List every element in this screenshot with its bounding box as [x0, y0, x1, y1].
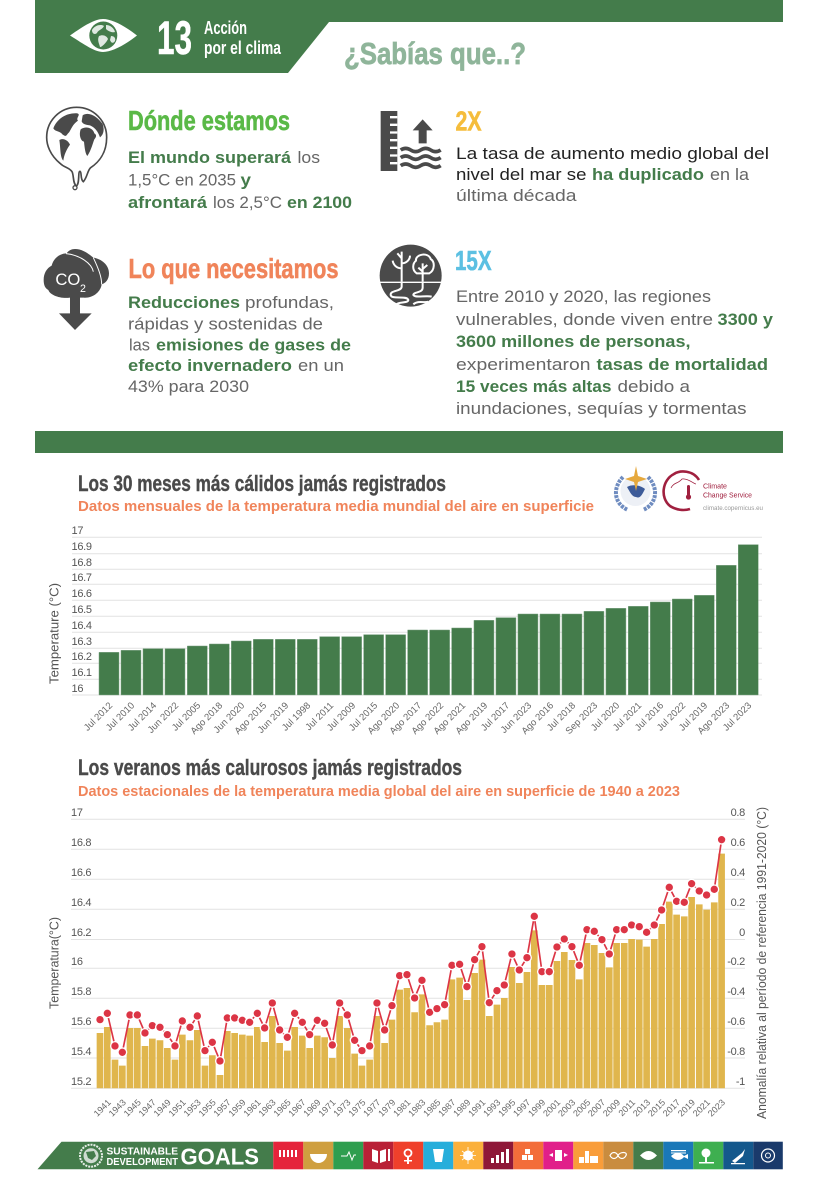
text block: los: [298, 149, 320, 167]
x axis labels: Ago 2017: [388, 700, 424, 737]
heading: Dónde estamos: [128, 105, 290, 136]
x axis labels: Jul 2017: [479, 700, 512, 734]
right y axis labels: [727, 807, 745, 1088]
x axis labels: Ago 2019: [454, 700, 490, 737]
right y axis labels: -1: [736, 1076, 745, 1088]
text block: rápidas y sostenidas de: [128, 316, 323, 334]
left y axis labels: 16.4: [71, 897, 91, 909]
x axis year labels: 2017: [661, 1097, 682, 1119]
text block: 15 veces más altas: [456, 378, 612, 396]
y axis labels: 16.3: [72, 636, 92, 648]
left y axis labels: [71, 807, 91, 1088]
y axis labels: 16.6: [72, 588, 92, 600]
combo chart: hottest summers: [46, 807, 769, 1119]
left y axis labels: 16: [71, 956, 83, 968]
x axis labels: Jul 2018: [545, 700, 578, 734]
x axis labels: Ago 2016: [520, 700, 556, 737]
SDG tiles row: [273, 1142, 783, 1169]
x axis year labels: 2003: [556, 1097, 577, 1119]
panel: lo que necesitamos: [44, 249, 351, 396]
panel: 15X mortality: [380, 245, 774, 418]
x axis year labels: 1951: [167, 1097, 188, 1119]
x axis year labels: 2009: [601, 1097, 622, 1119]
x axis year labels: 2023: [706, 1097, 727, 1119]
x axis year labels: 1961: [241, 1097, 263, 1119]
x axis year labels: 1943: [107, 1097, 128, 1119]
text block: 43% para 2030: [128, 378, 249, 396]
goal name: Acción: [204, 18, 247, 38]
bars: [99, 545, 758, 695]
logo: Copernicus Climate Change Service: Climate: [703, 482, 727, 490]
left y axis labels: 15.8: [71, 986, 91, 998]
text block: efecto invernadero: [128, 357, 292, 375]
x axis labels: Jul 2010: [104, 700, 137, 734]
text block: El mundo superará: [128, 149, 292, 167]
left y axis labels: 15.2: [71, 1076, 91, 1088]
x axis year labels: 1963: [256, 1097, 278, 1119]
icon: UN emblem: [80, 1145, 102, 1167]
footer wordmark: [106, 1143, 259, 1169]
x axis labels: Jun 2020: [212, 700, 247, 736]
x axis labels: Jul 1998: [280, 700, 313, 734]
x axis labels: Jul 2012: [82, 700, 115, 734]
x axis year labels: 1987: [436, 1097, 457, 1119]
x axis labels: Jul 2019: [677, 700, 710, 734]
text block: en 2100: [287, 194, 352, 212]
x axis labels: Jul 2005: [170, 700, 203, 734]
x axis year labels: 2005: [571, 1097, 592, 1119]
text block: La tasa de aumento medio global del: [456, 145, 769, 163]
text block: experimentaron: [456, 356, 590, 374]
goal name: por el clima: [204, 38, 282, 58]
text block: 3600 millones de personas,: [456, 333, 690, 351]
x axis labels: Ago 2020: [366, 700, 402, 737]
x axis year labels: 1999: [526, 1097, 547, 1119]
page title: ¿Sabías que..?: [344, 36, 526, 71]
footer wordmark: SUSTAINABLE: [106, 1145, 178, 1157]
icon: CO2 cloud with down arrow: [44, 249, 109, 330]
bar chart: 30 warmest months: [46, 525, 762, 737]
chart heading: 30 warmest months: Datos mensuales de la temperatura media mundial del aire en superficie: [78, 498, 594, 515]
y axis labels: 17: [72, 525, 83, 537]
text block: Entre 2010 y 2020, las regiones: [456, 288, 711, 306]
x axis year labels: 1957: [211, 1097, 233, 1119]
x axis year labels: 1971: [316, 1097, 338, 1119]
x axis year labels: 1965: [271, 1097, 293, 1119]
text block: en la: [710, 166, 750, 184]
x axis labels: Ago 2023: [696, 700, 732, 737]
left y axis labels: 16.2: [71, 927, 91, 939]
logo: Copernicus Climate Change Service: Change Service: [703, 490, 752, 500]
x axis labels: Ago 2022: [410, 700, 446, 737]
x axis year labels: 1993: [481, 1097, 502, 1119]
right y axis labels: -0.8: [727, 1046, 745, 1058]
text block: vulnerables, donde viven entre: [456, 311, 713, 329]
footer wordmark: GOALS: [180, 1143, 259, 1169]
x axis labels: Ago 2018: [189, 700, 225, 737]
x axis year labels: 1977: [361, 1097, 383, 1119]
x axis labels: Jul 2020: [589, 700, 622, 734]
x axis year labels: 2021: [691, 1097, 712, 1119]
tile icons: [279, 1147, 774, 1164]
right y axis labels: 0.2: [731, 897, 745, 909]
x axis year labels: 1941: [92, 1097, 113, 1119]
text block: [128, 149, 352, 212]
header banner: [35, 0, 783, 73]
x axis labels: Jul 2022: [655, 700, 688, 734]
x axis labels: Jul 2011: [303, 700, 336, 733]
x axis year labels: 1983: [406, 1097, 428, 1119]
x axis year labels: 1967: [286, 1097, 308, 1119]
x axis labels: Jul 2009: [325, 700, 358, 734]
x axis labels: Jul 2021: [611, 700, 644, 734]
x axis year labels: 1953: [182, 1097, 203, 1119]
y axis labels: 16: [72, 683, 83, 695]
text block: emisiones de gases de: [156, 336, 351, 354]
right y axis labels: 0.4: [731, 867, 745, 879]
x axis labels: Jul 2023: [721, 700, 754, 734]
panel: 2X sea level: [381, 106, 769, 205]
left y axis labels: 16.8: [71, 837, 91, 849]
x axis year labels: 1975: [346, 1097, 368, 1119]
text block: debido a: [618, 378, 691, 396]
icon: trees and roots in circle: [380, 245, 442, 307]
y axis labels: 16.5: [72, 604, 92, 616]
logo: Copernicus Climate Change Service: climate.copernicus.eu: [703, 505, 763, 512]
logo: Copernicus Climate Change Service: [664, 472, 763, 512]
text block: las: [129, 336, 150, 354]
text block: [128, 294, 351, 396]
x axis labels: Jul 2015: [347, 700, 380, 734]
chart heading: hottest summers: Los veranos más calurosos jamás registrados: [78, 755, 462, 780]
x axis labels: Jun 2019: [256, 700, 291, 736]
panel: donde estamos: [47, 105, 352, 212]
right y axis labels: -0.4: [727, 986, 745, 998]
text block: 3300 y: [718, 311, 774, 329]
x axis year labels: 1995: [496, 1097, 517, 1119]
right y axis labels: 0.6: [731, 837, 745, 849]
x axis labels: Jun 2023: [499, 700, 534, 736]
stat: 15X: [455, 245, 492, 276]
left y axis labels: 17: [71, 807, 83, 819]
chart heading: 30 warmest months: [78, 471, 594, 515]
x axis year labels: 1945: [122, 1097, 143, 1119]
icon: sea level rise: [381, 111, 441, 171]
text block: inundaciones, sequías y tormentas: [456, 400, 746, 418]
y axis labels: 16.8: [72, 557, 92, 569]
x axis year labels: 1959: [226, 1097, 248, 1119]
x axis labels: Ago 2015: [233, 700, 269, 737]
x axis year labels: 1997: [511, 1097, 532, 1119]
y axis labels: 16.7: [72, 572, 92, 584]
bars and line series: [96, 835, 726, 1088]
x axis labels: Jun 2022: [146, 700, 181, 736]
icon: CO2 cloud with down arrow: CO: [55, 270, 80, 289]
x axis year labels: 1969: [301, 1097, 323, 1119]
yellow bars: [97, 854, 725, 1088]
x axis year labels: 1989: [451, 1097, 472, 1119]
chart heading: 30 warmest months: Los 30 meses más cálidos jamás registrados: [78, 471, 446, 496]
x axis labels: Sep 2023: [564, 700, 600, 737]
icon: CO2 cloud with down arrow: 2: [80, 283, 86, 295]
red markers: [96, 835, 726, 1065]
icon: eye with globe: [70, 19, 137, 52]
right y axis labels: -0.2: [727, 956, 745, 968]
goal name: [204, 18, 282, 58]
logo: WMO: [616, 466, 655, 510]
heading: Lo que necesitamos: [128, 253, 338, 284]
text block: tasas de mortalidad: [596, 356, 768, 374]
right y axis labels: -0.6: [727, 1016, 745, 1028]
red line: [100, 840, 722, 1061]
goal number: 13: [157, 11, 192, 64]
green divider band: [35, 431, 783, 453]
left y axis labels: 15.4: [71, 1046, 91, 1058]
x axis labels: Jul 2014: [126, 700, 159, 734]
x axis year labels: 2001: [541, 1097, 562, 1119]
x axis year labels: 2015: [646, 1097, 667, 1119]
y axis labels: 16.4: [72, 620, 92, 632]
x axis year labels: 1985: [421, 1097, 443, 1119]
left y axis labels: 15.6: [71, 1016, 91, 1028]
text block: y: [240, 172, 252, 190]
y axis labels: 16.1: [72, 667, 92, 679]
y axis labels: 16.9: [72, 541, 92, 553]
chart heading: hottest summers: [78, 755, 680, 800]
text block: afrontará: [128, 194, 208, 212]
left y axis labels: 16.6: [71, 867, 91, 879]
x axis year labels: 2007: [586, 1097, 607, 1119]
right y axis labels: 0.8: [731, 807, 745, 819]
x axis year labels: 2013: [631, 1097, 652, 1119]
chart heading: hottest summers: Datos estacionales de la temperatura media global del aire en superficie de 1940 a 2023: [78, 783, 680, 800]
x axis labels: Ago 2021: [432, 700, 468, 737]
text block: última década: [456, 187, 577, 205]
y axis labels: 16.2: [72, 651, 92, 663]
icon: melting globe: [47, 107, 107, 190]
text block: los 2,5°C: [213, 194, 282, 212]
x axis year labels: 1981: [391, 1097, 413, 1119]
text block: en un: [298, 357, 344, 375]
footer wordmark: DEVELOPMENT: [106, 1156, 179, 1168]
footer: sustainable development goals banner: [38, 1142, 783, 1169]
x axis year labels: 1979: [376, 1097, 398, 1119]
x axis labels: Jul 2016: [633, 700, 666, 734]
left y axis title: Temperatura(°C): [46, 917, 62, 1009]
y axis title: Temperature (°C): [46, 583, 62, 684]
text block: 1,5°C en 2035: [128, 172, 236, 190]
text block: Reducciones: [128, 294, 240, 312]
x axis year labels: 1955: [197, 1097, 218, 1119]
text block: [456, 288, 774, 418]
text block: [456, 145, 769, 205]
text block: ha duplicado: [592, 166, 704, 184]
right y axis title: Anomalía relativa al período de referencia 1991-2020 (°C): [754, 807, 769, 1119]
x axis year labels: 1947: [137, 1097, 158, 1119]
stat: 2X: [456, 106, 482, 136]
y axis labels: [72, 525, 92, 695]
x axis year labels: [92, 1097, 727, 1119]
x axis year labels: 1949: [152, 1097, 173, 1119]
x axis year labels: 1973: [331, 1097, 353, 1119]
x axis year labels: 2011: [616, 1097, 637, 1118]
x axis labels: [82, 700, 754, 737]
text block: nivel del mar se: [456, 166, 586, 184]
x axis year labels: 1991: [466, 1097, 487, 1119]
x axis year labels: 2019: [676, 1097, 697, 1119]
text block: profundas,: [245, 294, 334, 312]
right y axis labels: 0: [739, 927, 745, 939]
